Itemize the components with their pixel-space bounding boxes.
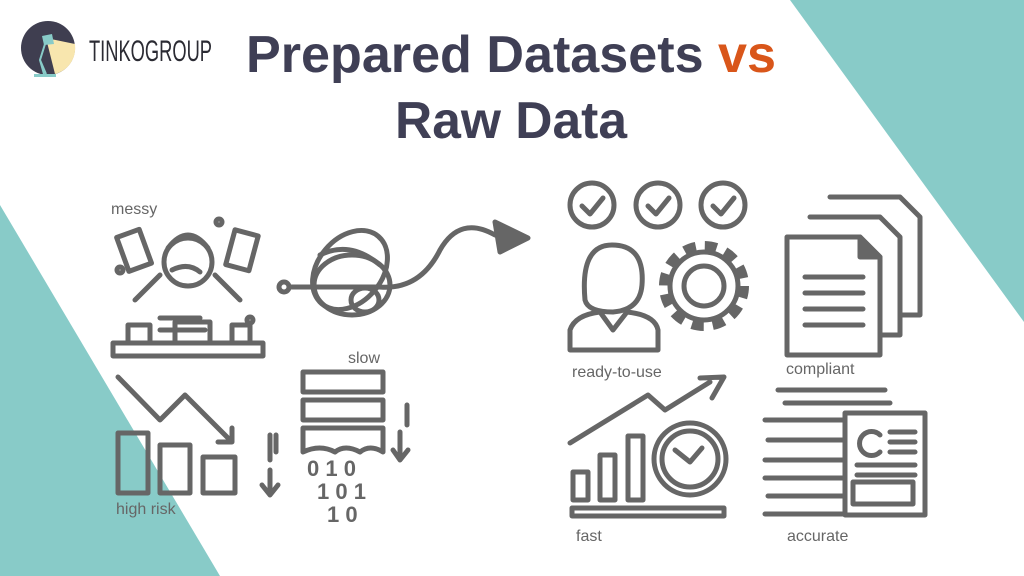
title: Raw Data xyxy=(395,92,628,150)
icon: high risk chart xyxy=(118,377,235,493)
icon: binary digits: 1 0 1 xyxy=(317,479,366,504)
teal background top-right xyxy=(790,0,1024,322)
icon: three checks xyxy=(570,183,745,227)
icon: binary digits xyxy=(307,456,366,527)
icon: slow server xyxy=(262,372,408,495)
title: Prepared Datasets vs xyxy=(246,26,776,84)
icon: fast chart clock xyxy=(570,377,726,516)
icon: binary digits: 0 1 0 xyxy=(307,456,356,481)
label messy: messy xyxy=(111,201,157,218)
logo: TINKOGROUP xyxy=(89,35,212,68)
label accurate: accurate xyxy=(787,528,848,545)
label high risk: high risk xyxy=(116,501,177,518)
logo xyxy=(21,21,212,77)
icon: person xyxy=(570,245,658,350)
label fast: fast xyxy=(576,528,602,545)
icon: binary digits: 1 0 xyxy=(327,502,358,527)
label slow: slow xyxy=(348,350,380,367)
title xyxy=(246,26,776,150)
label compliant: compliant xyxy=(786,361,855,378)
icon: gear xyxy=(664,246,744,326)
icon: messy person xyxy=(113,219,263,356)
icon: arrow head xyxy=(495,222,528,252)
icon: documents xyxy=(787,197,920,355)
icon: tangled path arrow xyxy=(279,216,495,324)
label ready-to-use: ready-to-use xyxy=(572,364,662,381)
teal background bottom-left xyxy=(0,205,220,576)
icon: accurate papers xyxy=(765,390,925,515)
